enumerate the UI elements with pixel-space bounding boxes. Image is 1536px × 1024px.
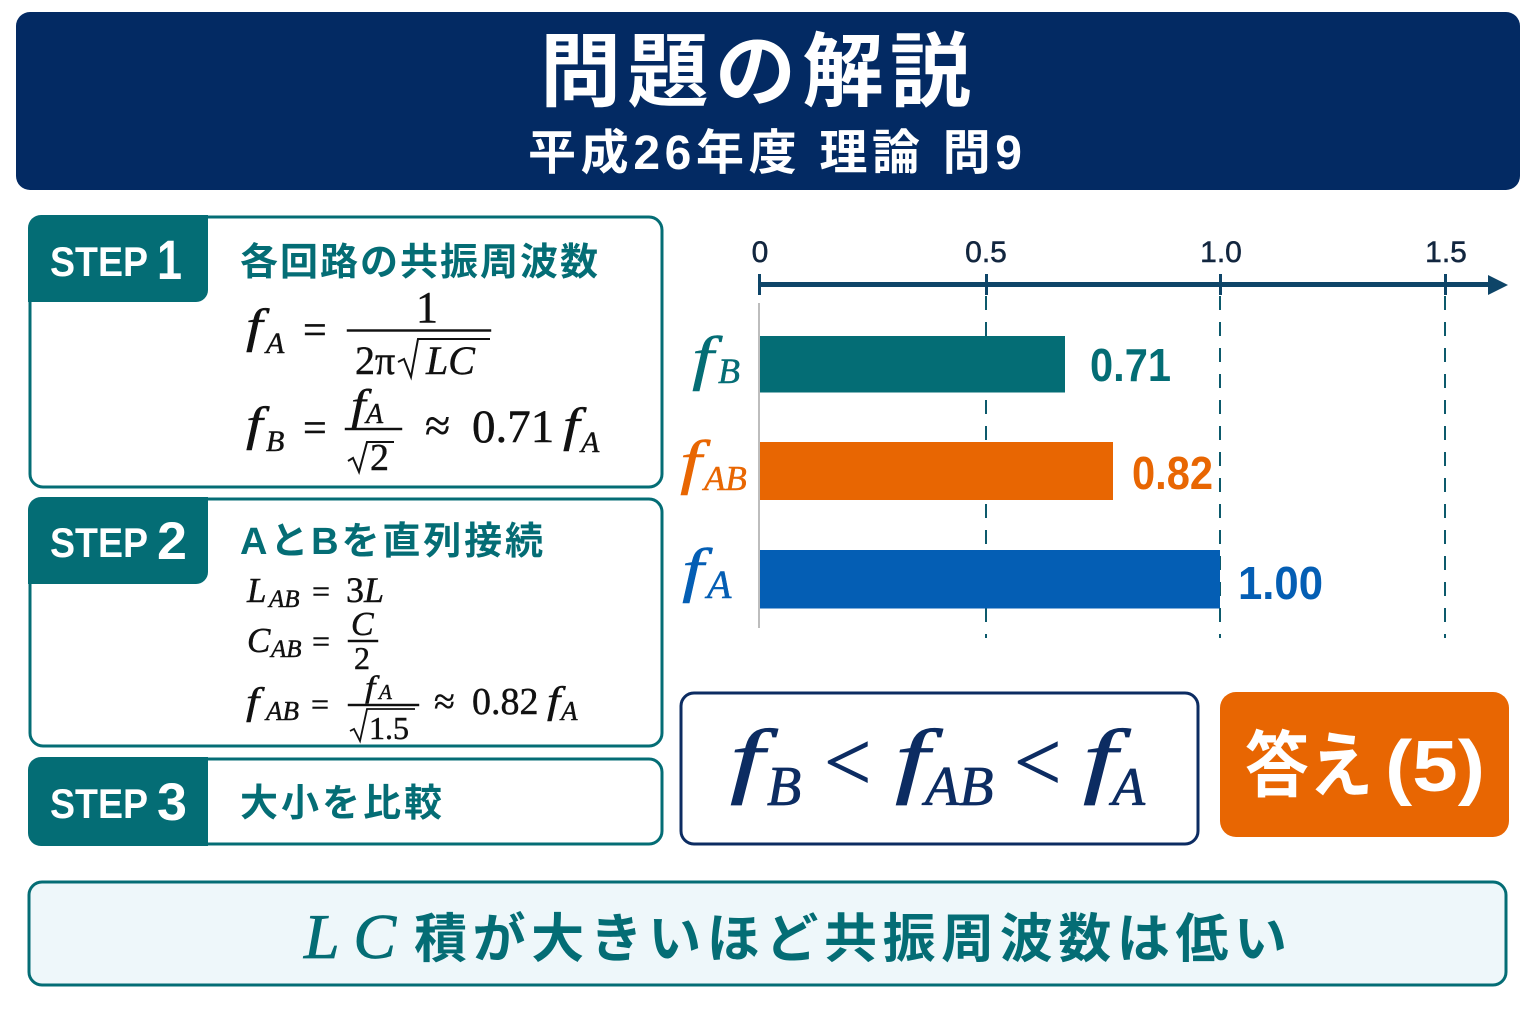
comparison box: <	[824, 716, 871, 809]
formula: CAB: =	[312, 623, 330, 659]
formula: fAB: f	[547, 680, 566, 722]
step 3 badge: 3	[157, 773, 187, 832]
formula: fA: 1	[416, 283, 438, 332]
formula: LAB	[246, 570, 384, 613]
formula: fAB: 1.5	[369, 710, 409, 746]
bottom note	[29, 882, 1506, 985]
formula: fAB: A	[377, 680, 392, 704]
bar: fB: 0.71	[1090, 339, 1171, 391]
comparison box: B	[767, 756, 801, 818]
bar: fA: f	[682, 537, 713, 604]
step 2 badge: 2	[157, 512, 187, 571]
formula: fA: =	[303, 308, 327, 354]
step 3 heading: 大小を比較	[240, 783, 442, 825]
formula: LAB: AB	[267, 586, 300, 613]
formula: CAB: 2	[354, 640, 370, 676]
bar: fB: f	[692, 325, 723, 392]
step 1 badge: 1	[157, 228, 182, 291]
answer box: 答え	[1245, 727, 1373, 807]
formula: fB: 0.71	[472, 401, 554, 453]
panel: step 3	[28, 757, 662, 846]
step 1 badge	[28, 215, 208, 302]
formula: fAB: =	[311, 686, 329, 722]
step 1 heading: 各回路の共振周波数	[240, 242, 598, 284]
bottom note: LC	[303, 901, 397, 972]
formula: fAB: f	[246, 681, 265, 723]
formula: fA: A	[264, 327, 285, 360]
axis labels: 1.0	[1200, 236, 1242, 269]
bar: fA	[682, 537, 1323, 609]
bar: fB	[692, 325, 1171, 392]
step 3 badge	[28, 757, 208, 846]
formula: fAB: A	[559, 696, 578, 726]
comparison box: A	[1109, 757, 1146, 817]
bar: fA: A	[704, 562, 732, 607]
formula: fB	[246, 381, 600, 479]
comparison box: f	[730, 712, 779, 805]
bar: fA: 1.00	[1238, 557, 1323, 609]
formula: fB: =	[303, 406, 327, 452]
axis labels: 1.5	[1425, 236, 1467, 269]
formula: fAB: f	[365, 670, 380, 704]
formula: fAB	[246, 670, 578, 746]
formula: fB: A	[579, 426, 600, 459]
bar: fB: B	[718, 351, 740, 391]
bar chart	[680, 236, 1508, 638]
formula: fAB: 0.82	[472, 681, 538, 723]
comparison box	[681, 693, 1198, 844]
formula: fAB: AB	[264, 696, 299, 726]
answer box	[1220, 692, 1509, 837]
formula: LAB: L	[246, 571, 266, 610]
formula: fA: 2π	[355, 338, 395, 383]
step 1 badge: STEP	[50, 238, 148, 285]
panel: step 1	[28, 215, 662, 487]
formula: fB: f	[351, 381, 373, 430]
formula: CAB: C	[351, 606, 374, 643]
formula: fA	[246, 283, 491, 383]
formula: fB: A	[364, 399, 384, 430]
formula: fA: f	[246, 300, 270, 353]
axis labels	[752, 236, 1467, 269]
bar: fAB: AB	[702, 459, 747, 498]
answer box: (5)	[1385, 727, 1485, 807]
formula: fA: LC	[425, 338, 476, 383]
title: 問題の解説	[540, 28, 971, 118]
step 3 badge: STEP	[50, 780, 148, 827]
formula: fB: ≈	[425, 400, 450, 451]
subtitle: 平成26年度 理論 問9	[528, 127, 1022, 180]
formula: CAB	[247, 606, 378, 676]
step 2 heading: AとBを直列接続	[240, 521, 543, 563]
formula: CAB: C	[247, 621, 271, 660]
panel: step 2	[28, 497, 662, 746]
comparison box: f	[1083, 712, 1132, 805]
step 2 badge: STEP	[50, 519, 148, 566]
formula: LAB: =	[312, 573, 330, 609]
comparison box: f	[895, 712, 944, 805]
comparison box: <	[1014, 716, 1061, 809]
formula: fB: f	[246, 398, 270, 451]
formula: LAB: 3L	[346, 570, 384, 610]
axis labels: 0	[752, 236, 768, 269]
formula: fAB: ≈	[434, 681, 455, 723]
grid lines	[986, 296, 1445, 638]
axis labels: 0.5	[965, 236, 1007, 269]
bar: fAB	[680, 429, 1213, 500]
formula: fB: 2	[370, 437, 389, 479]
axis arrow	[758, 274, 1508, 295]
bar: fAB: 0.82	[1132, 447, 1213, 499]
bottom note: 積が大きいほど共振周波数は低い	[414, 910, 1287, 969]
header banner	[16, 12, 1520, 190]
formula: fB: f	[563, 399, 587, 452]
formula: fB: B	[266, 425, 284, 458]
comparison box: AB	[921, 756, 993, 818]
bar: fAB: f	[680, 429, 711, 496]
step 2 badge	[28, 497, 208, 584]
formula: CAB: AB	[269, 636, 302, 663]
